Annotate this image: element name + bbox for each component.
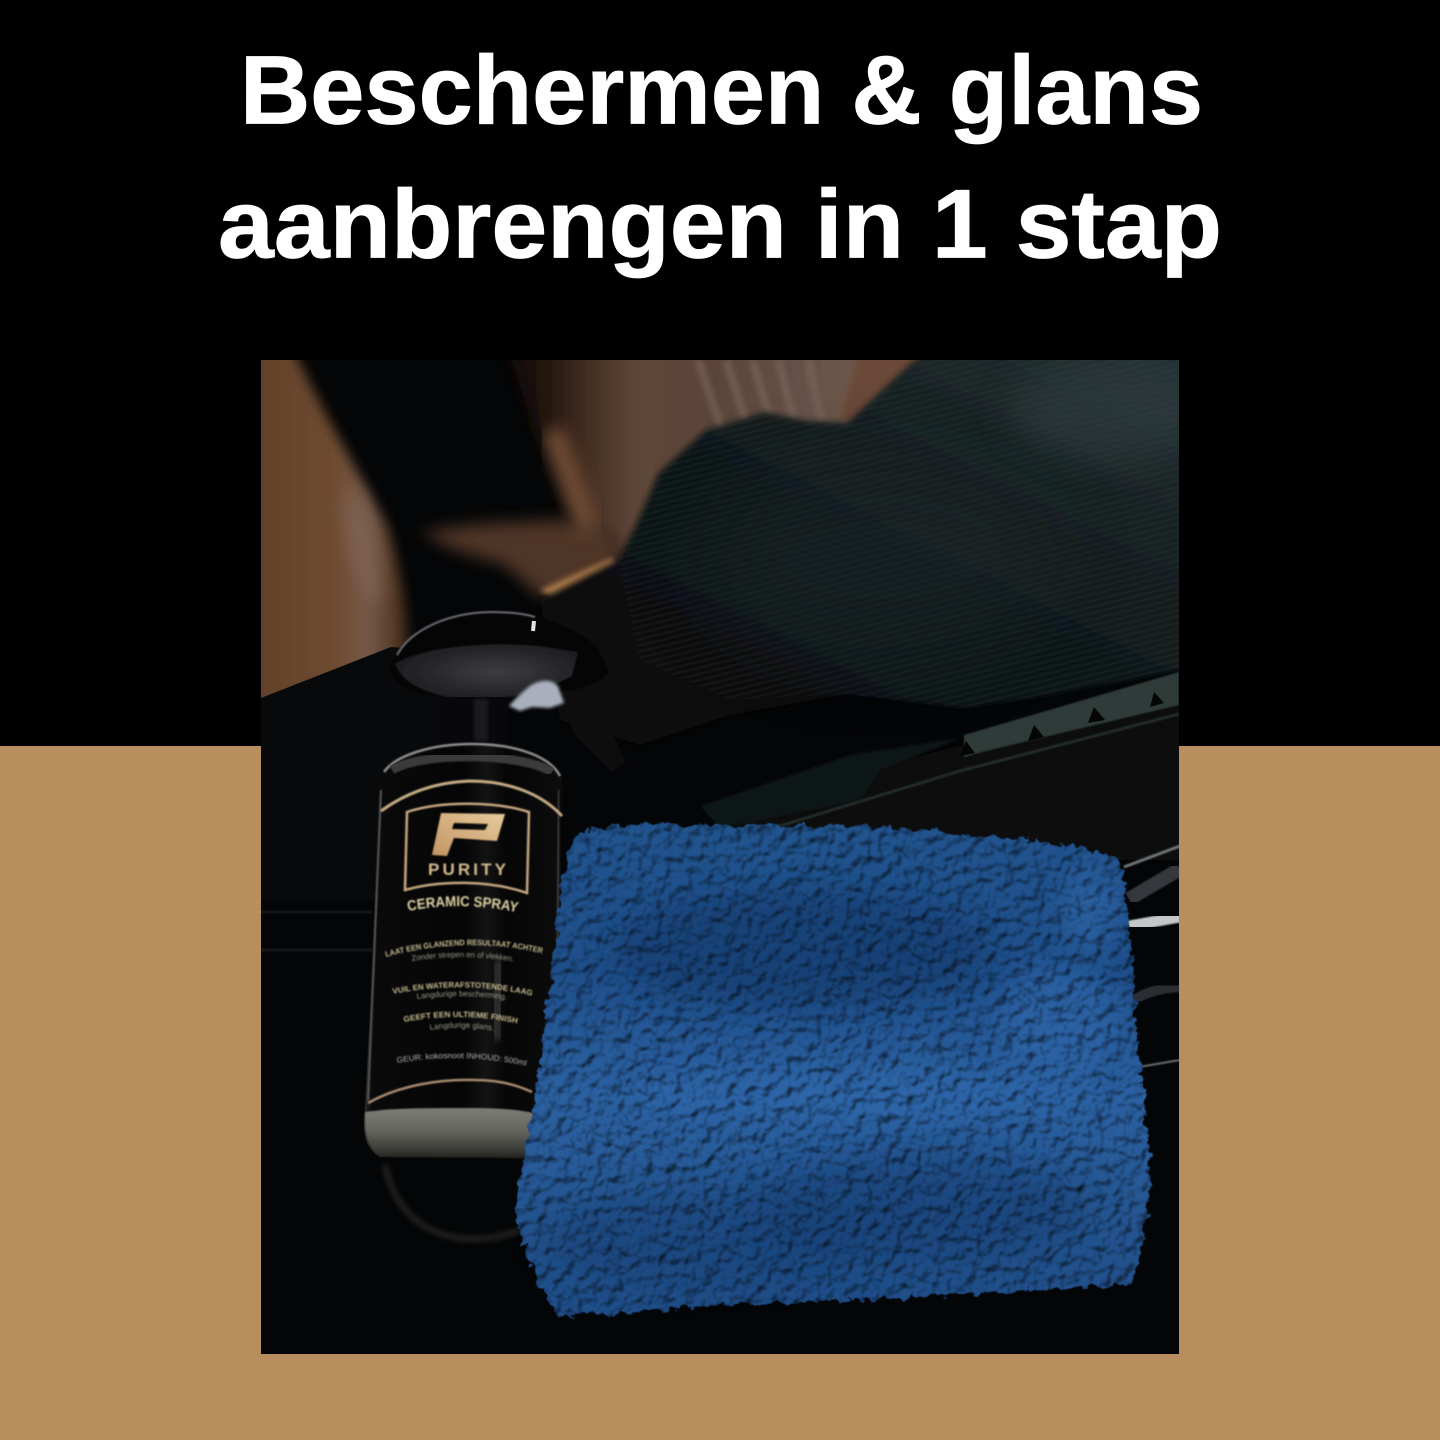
shoulder highlights (368, 744, 560, 1110)
spray bottle (364, 610, 626, 1158)
background: black top band (0, 0, 1440, 746)
neck (446, 697, 508, 742)
wheel spokes at right edge (1124, 846, 1180, 1068)
faint lines left of bottle (261, 912, 372, 950)
title (218, 36, 1222, 278)
spray head (390, 611, 609, 711)
bottle body (364, 746, 497, 1149)
car interior: brown leather seats (220, 320, 950, 720)
label copy: Langdurige bescherming. (416, 990, 507, 1002)
gold label rings (368, 781, 562, 1103)
P logo (432, 813, 505, 856)
brand name: PURITY (428, 860, 507, 879)
logo frame (405, 804, 529, 893)
title: Beschermen & glans (240, 36, 1203, 144)
label copy: GEEFT EEN ULTIEME FINISH (402, 1010, 519, 1024)
label copy: GEUR: kokosnoot INHOUD: 500ml (396, 1052, 528, 1066)
trigger (570, 723, 626, 772)
label copy: VUIL EN WATERAFSTOTENDE LAAG (392, 981, 533, 996)
label copy (384, 938, 544, 1066)
label copy: Zonder strepen en of vlekken. (411, 952, 514, 962)
title: aanbrengen in 1 stap (218, 170, 1222, 278)
nozzle (509, 681, 564, 711)
dashboard trim with notches (700, 672, 1179, 860)
background: tan lower band (0, 746, 1440, 1440)
left dark dashboard panel (261, 647, 404, 727)
car seat: dark textured upholstery (540, 350, 1210, 745)
label copy: LAAT EEN GLANZEND RESULTAAT ACHTER (384, 938, 544, 958)
blue microfibre towel (514, 824, 1150, 1317)
grey base (365, 1108, 535, 1158)
panel: product photo (261, 360, 1179, 1354)
reflection of bottle on hood (385, 1165, 520, 1239)
towel shading (530, 866, 1120, 1290)
product name: CERAMIC SPRAY (406, 895, 520, 912)
label copy: Langdurige glans. (429, 1022, 494, 1032)
